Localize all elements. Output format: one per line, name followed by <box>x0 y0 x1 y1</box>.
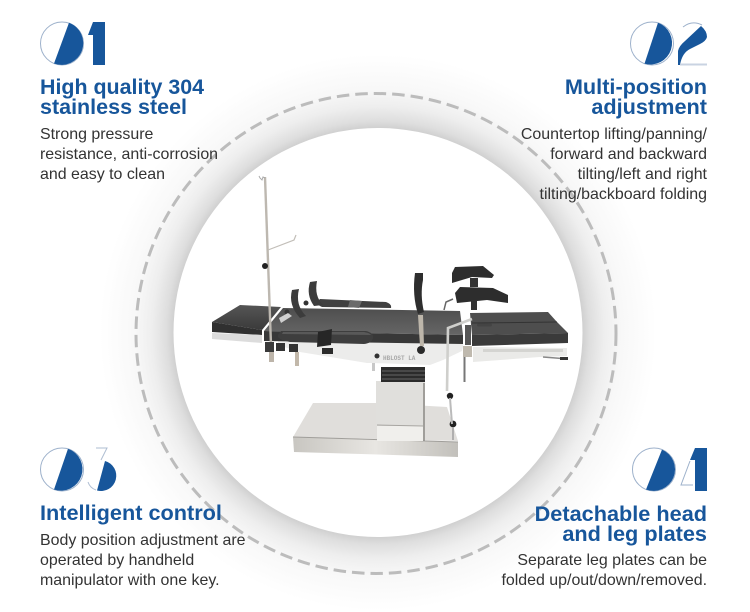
text block 2: forward and backward <box>550 146 707 163</box>
heading 4: and leg plates <box>562 521 707 546</box>
head plate <box>212 305 281 343</box>
operating table illustration <box>212 176 568 457</box>
IV pole <box>259 176 296 362</box>
text block 4 <box>501 552 707 589</box>
heading 3: Intelligent control <box>40 500 222 525</box>
white central circle <box>174 128 582 537</box>
text block 2: Countertop lifting/panning/ <box>521 126 707 143</box>
leg plate section <box>470 312 568 362</box>
text block 4: Separate leg plates can be <box>517 552 707 569</box>
upright support <box>414 273 425 354</box>
text block 1: and easy to clean <box>40 166 165 183</box>
rear arm support <box>317 299 391 308</box>
number 01 <box>40 22 105 65</box>
heading 2 <box>565 74 707 119</box>
base plate <box>293 403 458 457</box>
text block 1: Strong pressure <box>40 126 153 143</box>
heading 2: adjustment <box>591 94 707 119</box>
text block 1 <box>40 126 218 183</box>
column <box>376 367 425 441</box>
main table top <box>264 308 463 344</box>
text block 3: manipulator with one key. <box>40 572 220 589</box>
number 02 <box>630 22 707 66</box>
number 04 <box>632 448 707 491</box>
heading 1 <box>40 75 204 119</box>
clamps under the rail <box>276 343 299 366</box>
text block 4: folded up/out/down/removed. <box>501 572 707 589</box>
heading 1: stainless steel <box>40 95 187 119</box>
heading 4 <box>535 501 707 546</box>
silver side rail: HBLOST LA <box>383 355 416 362</box>
dashed ring <box>136 94 616 574</box>
text block 2: tilting/left and right <box>578 166 707 183</box>
text block 3 <box>40 532 246 589</box>
text block 2 <box>521 126 707 203</box>
text block 3: Body position adjustment are <box>40 532 246 549</box>
front arm support with strap <box>278 329 373 354</box>
curved side supports <box>279 281 323 323</box>
heading 2: Multi-position <box>565 74 707 99</box>
heading 4: Detachable head <box>535 501 707 526</box>
silver side rail <box>278 340 463 371</box>
head support pads <box>444 266 508 310</box>
number 03 <box>40 448 116 491</box>
heading 1: High quality 304 <box>40 75 204 99</box>
shaded ring behind the central circle <box>88 42 668 612</box>
adjustment rods and clamps <box>447 319 492 440</box>
text block 3: operated by handheld <box>40 552 194 569</box>
text block 1: resistance, anti-corrosion <box>40 146 218 163</box>
text block 2: tilting/backboard folding <box>540 186 707 203</box>
